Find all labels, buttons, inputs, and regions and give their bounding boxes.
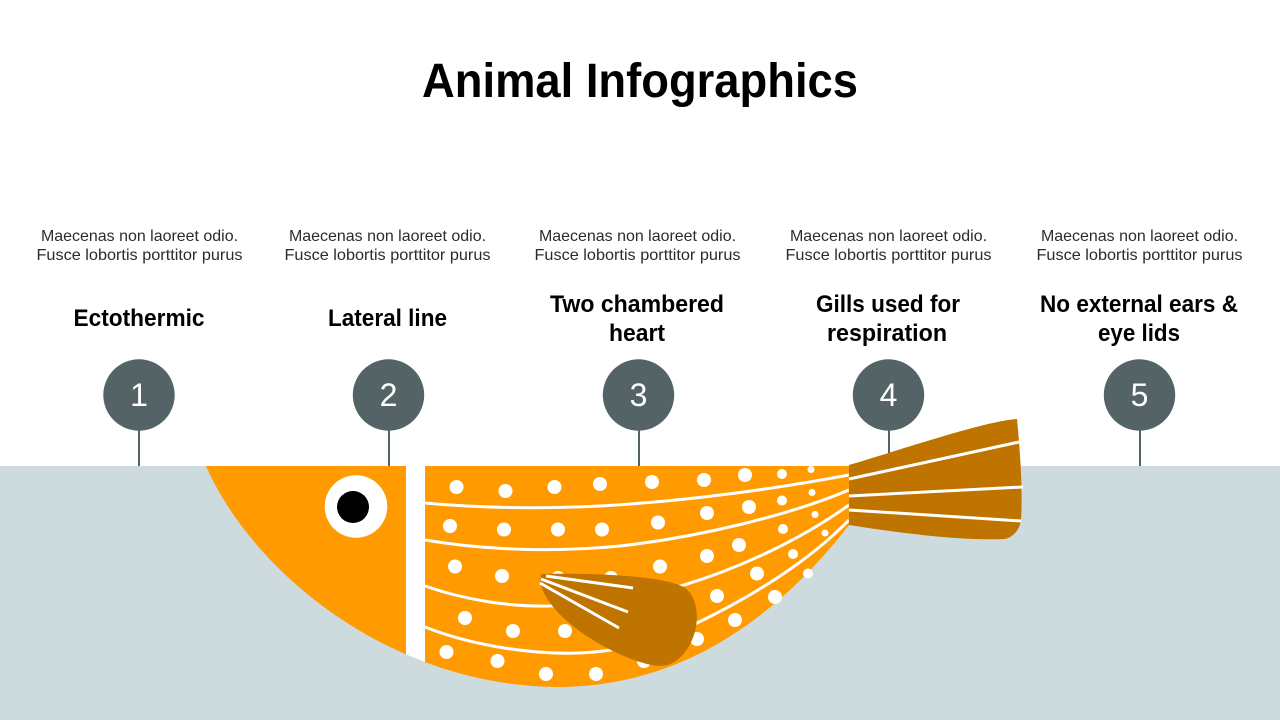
stem 2 [388,425,390,466]
column 2: lateral line [284,228,490,466]
description 1: Fusce lobortis porttitor purus [36,247,242,264]
description 2: Maecenas non laoreet odio. [289,228,486,245]
number 2: 2 [380,377,397,413]
description 5: Maecenas non laoreet odio. [1041,228,1238,245]
heading 1: Ectothermic [74,305,204,332]
column 1: ectothermic [36,228,242,466]
description 3: Maecenas non laoreet odio. [539,228,736,245]
body spots [440,466,828,681]
marker 2 [353,359,424,431]
marker 4 [853,359,924,431]
marker 1 [103,359,175,431]
fish body [206,466,849,687]
column 5: no external ears [1036,228,1242,466]
stem 3 [638,425,640,466]
description 4: Fusce lobortis porttitor purus [786,247,992,264]
column 3: two chambered heart [534,228,740,466]
number 5: 5 [1131,377,1148,413]
marker 3 [603,359,674,431]
heading 5: eye lids [1098,320,1180,347]
fish illustration [206,419,1023,687]
heading 3: Two chambered [550,291,724,318]
water background [0,466,1280,720]
number 1: 1 [130,377,148,413]
description 5: Fusce lobortis porttitor purus [1036,247,1242,264]
description 3: Fusce lobortis porttitor purus [534,247,740,264]
column 4: gills [786,228,992,466]
lateral lines [425,475,849,653]
stem 1 [138,425,140,466]
pectoral fin [540,574,697,666]
number 4: 4 [880,377,897,413]
gill stripe [406,466,425,670]
description 2: Fusce lobortis porttitor purus [284,247,490,264]
heading 3: heart [609,320,665,347]
stem 5 [1139,425,1141,466]
eye [325,475,387,538]
heading 4: Gills used for [816,291,960,318]
marker 5 [1104,359,1175,431]
heading 2: Lateral line [328,305,447,332]
description 4: Maecenas non laoreet odio. [790,228,987,245]
number 3: 3 [630,377,647,413]
heading 4: respiration [827,320,947,347]
heading 5: No external ears & [1040,291,1238,318]
description 1: Maecenas non laoreet odio. [41,228,238,245]
tail fin [849,419,1023,539]
stem 4 [888,425,890,466]
title: Animal Infographics [422,55,858,108]
